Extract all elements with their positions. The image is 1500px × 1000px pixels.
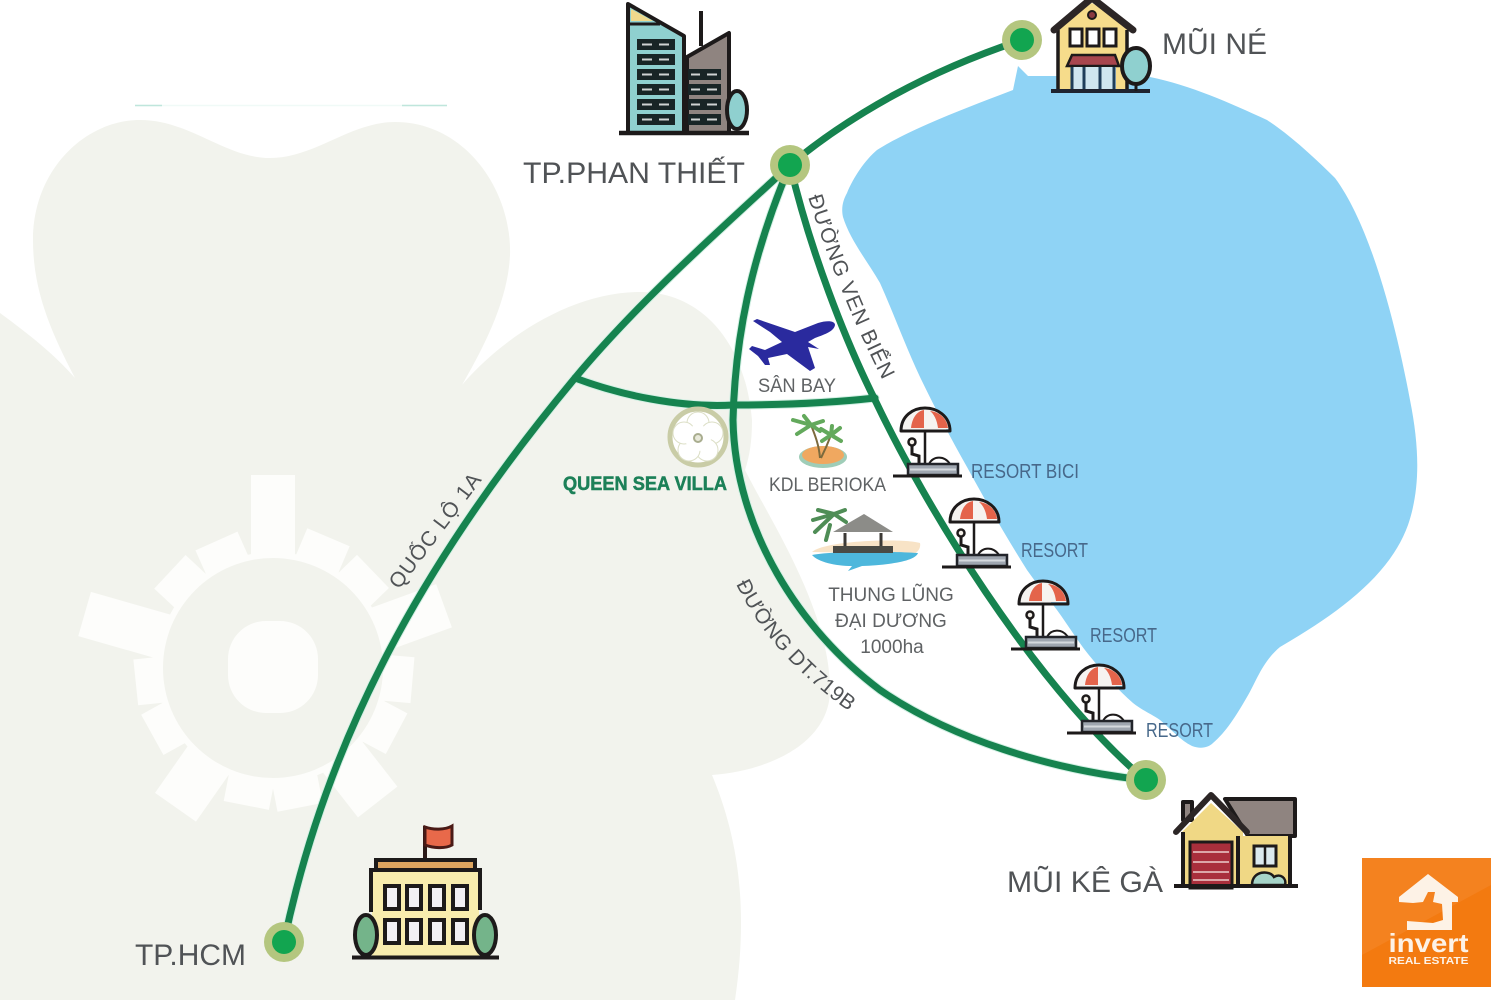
- sea: [842, 66, 1417, 748]
- icon: resort umbrella 1: [893, 408, 962, 476]
- road: coastal road: [790, 165, 1145, 780]
- icon: faint gear watermark: [78, 475, 452, 822]
- node: Mũi Kê Gà: [1126, 760, 1166, 800]
- label: coastal road: ĐƯỜNG VEN BIỂN: [808, 194, 895, 379]
- icon: seaside pavilion: [812, 510, 920, 571]
- label: Thung Lũng Đại Dương: 1000ha: [860, 637, 924, 658]
- label: airport: SÂN BAY: [758, 375, 836, 397]
- logo: Invert Real Estate: [1362, 858, 1491, 987]
- icon: palm island: [793, 416, 847, 468]
- label: resort 2: RESORT: [1021, 540, 1088, 562]
- icon: white flower: [673, 412, 723, 461]
- logo: Queen Sea Villa: [563, 409, 727, 495]
- icon: resort umbrella 3: [1011, 581, 1080, 649]
- label: TP.HCM: TP.HCM: [135, 939, 246, 972]
- icon: resort umbrella 2: [942, 499, 1011, 567]
- road: ĐT.719B: [733, 165, 1145, 780]
- road: to Mũi Né: [790, 40, 1022, 165]
- icon: TP.HCM school: [352, 826, 499, 958]
- node: Phan Thiết: [770, 145, 810, 185]
- road network: [284, 40, 1145, 942]
- icon: airplane: [749, 319, 835, 371]
- label: Thung Lũng Đại Dương: THUNG LŨNG: [828, 584, 954, 606]
- background: pale flower shape: [0, 106, 830, 1000]
- icon: Mũi Kê Gà house: [1174, 795, 1298, 888]
- label: Thung Lũng Đại Dương: ĐẠI DƯƠNG: [835, 611, 947, 632]
- label: Queen Sea Villa: QUEEN SEA VILLA: [563, 474, 727, 495]
- road: Quốc lộ 1A: [284, 165, 790, 942]
- icon: house with thumb: [1399, 874, 1458, 930]
- road: connector: [575, 378, 875, 405]
- label: KDL Berioka: KDL BERIOKA: [769, 475, 886, 496]
- icon: city towers: [619, 4, 749, 133]
- label: invert: invert: [1388, 928, 1469, 958]
- label: resort 4: RESORT: [1146, 720, 1213, 742]
- icon: Mũi Né house: [1051, 0, 1150, 91]
- label: ĐT.719B road: ĐƯỜNG DT.719B: [736, 578, 854, 709]
- label: Resort Bici: RESORT BICI: [971, 461, 1079, 483]
- label: TP.Phan Thiết: TP.PHAN THIẾT: [523, 156, 745, 190]
- label: Mũi Kê Gà: MŨI KÊ GÀ: [1007, 865, 1163, 899]
- node: Mũi Né: [1002, 20, 1042, 60]
- label: Thung Lũng Đại Dương: [828, 584, 954, 658]
- label: Quốc lộ 1A: QUỐC LỘ 1A: [384, 468, 486, 593]
- node: TP.HCM: [264, 922, 304, 962]
- icon: resort umbrella 4: [1067, 665, 1136, 733]
- label: Mũi Né: MŨI NÉ: [1162, 27, 1267, 61]
- label: real estate: REAL ESTATE: [1388, 955, 1468, 967]
- label: resort 3: RESORT: [1090, 625, 1157, 647]
